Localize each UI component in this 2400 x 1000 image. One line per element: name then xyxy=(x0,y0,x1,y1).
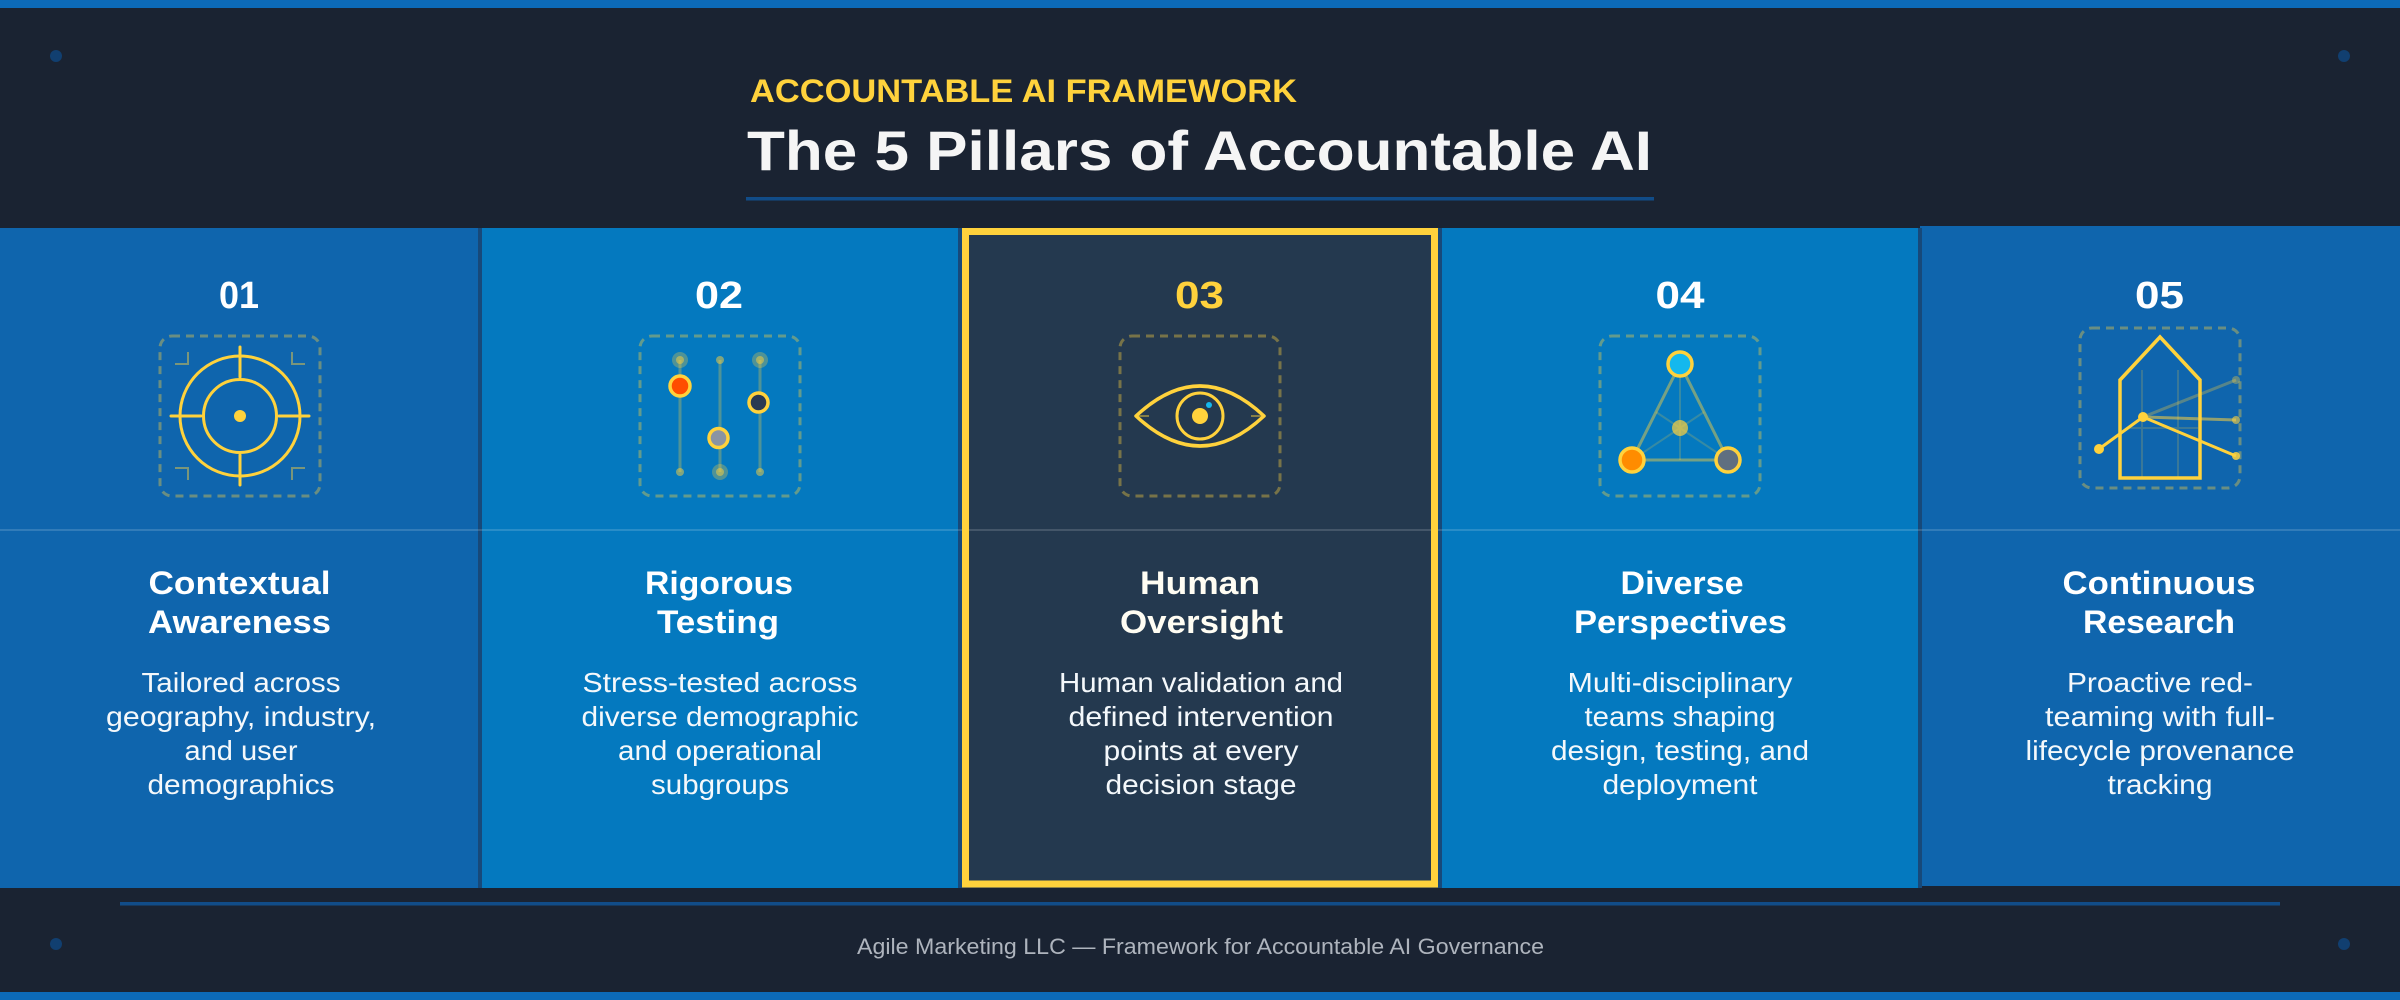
eyebrow heading: ACCOUNTABLE AI FRAMEWORK xyxy=(750,73,1297,109)
description: points at every xyxy=(1104,735,1298,766)
heading xyxy=(148,565,331,640)
icon: house with provenance rays xyxy=(2080,328,2240,488)
panel 2: rigorous testing xyxy=(482,228,958,888)
panel 3: human oversight xyxy=(962,228,1438,888)
description: lifecycle provenance xyxy=(2026,735,2294,766)
description: decision stage xyxy=(1106,769,1296,800)
icon: target crosshair xyxy=(160,336,320,496)
description: Tailored across xyxy=(142,667,340,698)
icon: network triangle xyxy=(1600,336,1760,496)
description: geography, industry, xyxy=(106,701,376,732)
description: teams shaping xyxy=(1584,701,1776,732)
number 04: 04 xyxy=(1656,275,1704,317)
heading xyxy=(2062,565,2256,640)
description: Human validation and xyxy=(1059,667,1343,698)
description: and operational xyxy=(618,735,822,766)
description xyxy=(1551,667,1809,800)
heading: Awareness xyxy=(148,604,331,640)
description: teaming with full- xyxy=(2045,701,2275,732)
heading: Diverse xyxy=(1620,565,1744,601)
icon: eye xyxy=(1120,336,1280,496)
description: diverse demographic xyxy=(582,701,858,732)
description: tracking xyxy=(2108,769,2212,800)
header xyxy=(746,73,1654,200)
description xyxy=(106,667,376,800)
number 01: 01 xyxy=(219,275,259,317)
description xyxy=(582,667,858,800)
description: demographics xyxy=(148,769,334,800)
heading: Continuous xyxy=(2062,565,2256,601)
heading: Perspectives xyxy=(1574,604,1787,640)
number 02: 02 xyxy=(695,275,743,317)
heading xyxy=(1120,565,1283,640)
heading: Testing xyxy=(657,604,779,640)
highlight border for pillar 3 xyxy=(966,232,1434,884)
number 03: 03 xyxy=(1175,275,1224,317)
panel 5: continuous research xyxy=(1920,226,2400,886)
heading xyxy=(645,565,793,640)
description: Stress-tested across xyxy=(582,667,858,698)
heading: Oversight xyxy=(1120,604,1283,640)
icon: sliders xyxy=(640,336,800,496)
heading: Human xyxy=(1140,565,1260,601)
heading: Rigorous xyxy=(645,565,793,601)
description: deployment xyxy=(1602,769,1758,800)
heading xyxy=(1574,565,1787,640)
description xyxy=(1059,667,1343,800)
description: and user xyxy=(184,735,298,766)
footer xyxy=(120,902,2280,959)
description xyxy=(2026,667,2294,800)
panel 4: diverse perspectives xyxy=(1442,228,1918,888)
heading: Research xyxy=(2083,604,2235,640)
description: subgroups xyxy=(651,769,789,800)
heading: Contextual xyxy=(148,565,330,601)
footer text: Agile Marketing LLC — Framework for Accountable AI Governance xyxy=(857,934,1544,959)
description: design, testing, and xyxy=(1551,735,1809,766)
title: The 5 Pillars of Accountable AI xyxy=(747,119,1652,182)
description: Multi-disciplinary xyxy=(1568,667,1792,698)
panel 1: contextual awareness xyxy=(0,228,478,888)
description: defined intervention xyxy=(1068,701,1334,732)
description: Proactive red- xyxy=(2067,667,2253,698)
number 05: 05 xyxy=(2135,275,2184,317)
